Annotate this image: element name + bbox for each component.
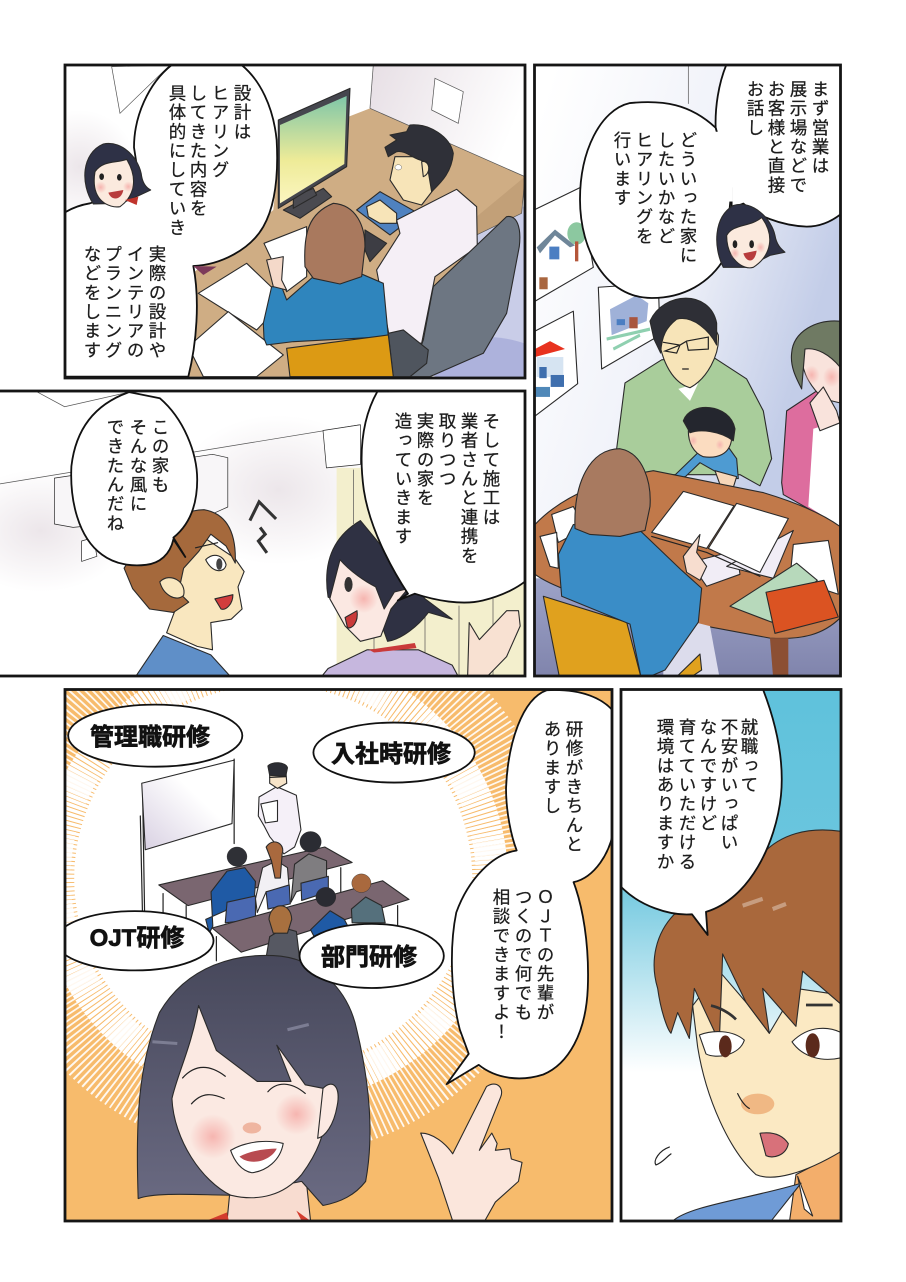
surprise mark — [250, 502, 276, 553]
speech text: house: できたんだね — [105, 418, 125, 533]
speech text: student: 育てていただける — [677, 718, 697, 872]
nose and mouth — [738, 1094, 788, 1157]
speech text: construction: 造っていきます — [393, 412, 413, 546]
office chair — [410, 216, 520, 377]
eyes — [699, 1005, 843, 1059]
rear desk — [159, 847, 352, 906]
speech text: sales: したいかなど — [656, 131, 676, 246]
panel border — [534, 65, 840, 676]
man in white shirt — [367, 125, 477, 343]
speech text: sales: ヒアリングを — [634, 131, 654, 246]
panel: construction explanation — [0, 390, 530, 684]
boy — [124, 510, 244, 681]
speech text: house — [105, 418, 170, 533]
tag label: new hire training: 入社時研修 — [331, 741, 451, 768]
speech text: sales: どういった家に — [678, 131, 698, 265]
speech bubble: training — [447, 690, 614, 1084]
speech text: construction: 取りつつ — [437, 412, 457, 489]
father in green shirt — [617, 298, 772, 486]
speech text: sales: お客様と直接 — [766, 80, 786, 195]
woman in blue sweater — [263, 203, 388, 345]
speech bubble center — [580, 102, 732, 298]
guide woman — [318, 521, 520, 681]
speech text: student: なんですけど — [698, 718, 718, 833]
speech text: construction: 業者さんと連携を — [459, 412, 479, 566]
speech text: design: 設計は — [232, 84, 252, 142]
speech text: sales: お話し — [745, 80, 765, 138]
tag bubble: new hire — [313, 723, 475, 783]
tag label: OJT training: OJT研修 — [90, 925, 184, 952]
speech text: student: 就職って — [739, 718, 759, 795]
baby in blue — [670, 407, 738, 487]
lecturer — [258, 763, 301, 854]
speech text: training — [491, 720, 584, 1042]
large guide character — [137, 955, 370, 1221]
panel border — [65, 690, 612, 1221]
speech text: construction: 実際の家を — [415, 412, 435, 508]
speech text: construction — [393, 412, 501, 566]
speech text: house: そんな風に — [128, 418, 148, 514]
speech text: house: この家も — [150, 418, 170, 495]
speech bubble: house — [71, 392, 197, 565]
speech bubble top right — [716, 64, 842, 227]
panel border — [65, 65, 525, 378]
students at front desk — [266, 874, 385, 961]
speech text: design: インテリアの — [125, 245, 145, 360]
papers and open book — [540, 491, 838, 633]
tag bubble: department — [300, 924, 444, 988]
speech text: sales: 展示場などで — [788, 80, 808, 195]
panel border — [621, 690, 841, 1221]
panel: design consultation at the desk — [64, 64, 526, 380]
front desk — [212, 881, 409, 952]
panel: sales hearing at the showroom — [534, 64, 842, 680]
small guide head — [85, 143, 151, 207]
tag label: department training: 部門研修 — [321, 944, 417, 971]
speech text: sales: まず営業は — [810, 80, 830, 176]
illustration: boy and guide in a finished house — [0, 390, 530, 684]
table — [535, 471, 840, 638]
speech text: training: ＯＪＴの先輩が — [535, 888, 555, 1022]
speech text: sales: 行います — [612, 131, 632, 208]
hair — [654, 830, 843, 1042]
speech text: construction: そして施工は — [481, 412, 501, 527]
speech text: design: 実際の設計や — [147, 245, 167, 360]
speech text: training: 相談できますよ！ — [491, 888, 511, 1042]
sweat mark — [655, 1147, 671, 1165]
speech text: design: してきた内容を — [188, 84, 208, 218]
speech text: student: 不安がいっぱい — [719, 718, 739, 852]
tag label: management training: 管理職研修 — [90, 724, 210, 751]
speech text: training: ありますし — [542, 720, 562, 816]
illustration: designer and customer at desk — [66, 66, 524, 377]
seated saleswoman — [543, 449, 720, 680]
speech bubble shape — [65, 65, 277, 377]
speech text: design: などをします — [82, 245, 102, 360]
illustration: student close-up — [619, 688, 843, 1223]
guide head — [717, 204, 785, 268]
panel: worried student — [619, 688, 843, 1223]
speech bubble: construction — [362, 390, 530, 603]
speech bubble — [619, 688, 782, 935]
illustration: family at round table — [535, 64, 842, 680]
tag bubble: OJT — [56, 911, 214, 970]
students at rear desk — [206, 831, 328, 933]
panel border — [0, 391, 525, 676]
speech text: design — [82, 84, 252, 360]
mother in pink cardigan — [782, 321, 840, 526]
whiteboard — [140, 759, 234, 913]
speech text: student: 環境はありますか — [655, 718, 675, 872]
face — [693, 971, 843, 1177]
speech text: training: つくので何でも — [513, 888, 533, 1022]
shirt and neck — [673, 1150, 843, 1223]
pointing hand — [421, 1084, 522, 1221]
speech text: student — [655, 718, 759, 872]
panel: training programs — [64, 688, 614, 1222]
speech text: sales — [612, 80, 830, 265]
speech text: training: 研修がきちんと — [564, 720, 584, 854]
wall posters — [535, 188, 660, 416]
speech text: design: プランニング — [103, 245, 123, 360]
speech text: design: 具体的にしていき — [167, 84, 187, 238]
speech text: design: ヒアリング — [210, 84, 230, 180]
tag bubble: management — [68, 705, 242, 767]
illustration: training room and guide — [66, 690, 611, 1220]
